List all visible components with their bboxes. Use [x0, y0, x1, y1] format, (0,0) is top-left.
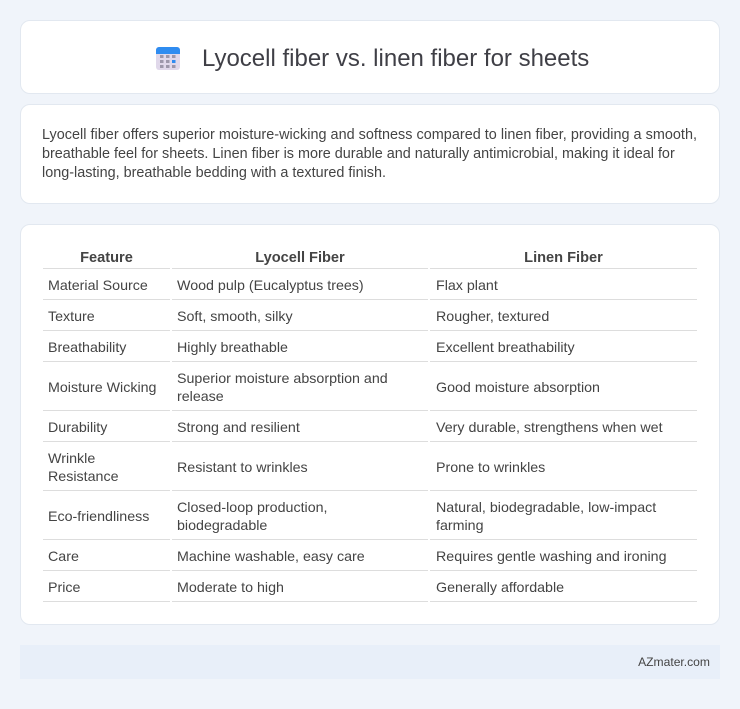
comparison table: farming: [436, 518, 484, 534]
comparison table: Linen Fiber: [524, 250, 603, 266]
comparison table: Durability: [48, 420, 107, 436]
comparison table: Care: [48, 549, 79, 565]
comparison table: release: [177, 389, 224, 405]
summary text: Lyocell fiber offers superior moisture-wicking and softness compared to linen fiber, providing a smooth,: [42, 127, 697, 143]
comparison table: Flax plant: [436, 278, 498, 294]
comparison table: Moisture Wicking: [48, 380, 156, 396]
comparison table: Wood pulp (Eucalyptus trees): [177, 278, 364, 294]
icon: calendar: [156, 47, 180, 70]
comparison table: Material Source: [48, 278, 148, 294]
comparison table: Prone to wrinkles: [436, 460, 545, 476]
comparison table: Price: [48, 580, 80, 596]
comparison table: Machine washable, easy care: [177, 549, 365, 565]
comparison table: Texture: [48, 309, 95, 325]
comparison table: Soft, smooth, silky: [177, 309, 293, 325]
comparison table: [43, 250, 697, 602]
footer bar: [20, 645, 720, 679]
comparison table: Rougher, textured: [436, 309, 549, 325]
comparison table: Excellent breathability: [436, 340, 575, 356]
comparison table: Strong and resilient: [177, 420, 300, 436]
comparison table: Wrinkle: [48, 451, 95, 467]
panel: comparison table: [20, 224, 720, 625]
comparison table: Superior moisture absorption and: [177, 371, 388, 387]
comparison table: Good moisture absorption: [436, 380, 600, 396]
comparison table: Eco-friendliness: [48, 509, 149, 525]
footer credit: AZmater.com: [638, 655, 710, 669]
header panel: [20, 20, 720, 94]
comparison table: Requires gentle washing and ironing: [436, 549, 667, 565]
comparison table: Closed-loop production,: [177, 500, 328, 516]
comparison table: Moderate to high: [177, 580, 284, 596]
comparison table: Generally affordable: [436, 580, 564, 596]
summary text: breathable feel for sheets. Linen fiber is more durable and naturally antimicrobial, making it ideal for: [42, 146, 675, 162]
summary text: long-lasting, breathable bedding with a textured finish.: [42, 165, 386, 181]
comparison table: Feature: [80, 250, 133, 266]
comparison table: Highly breathable: [177, 340, 288, 356]
comparison table: Lyocell Fiber: [255, 250, 345, 266]
comparison table: Resistance: [48, 469, 118, 485]
title: Lyocell fiber vs. linen fiber for sheets: [202, 45, 589, 72]
panel: summary: [20, 104, 720, 204]
comparison table: Natural, biodegradable, low-impact: [436, 500, 656, 516]
comparison table: Resistant to wrinkles: [177, 460, 308, 476]
comparison table: Breathability: [48, 340, 126, 356]
comparison table: biodegradable: [177, 518, 267, 534]
comparison table: Very durable, strengthens when wet: [436, 420, 663, 436]
summary text: [42, 127, 697, 181]
